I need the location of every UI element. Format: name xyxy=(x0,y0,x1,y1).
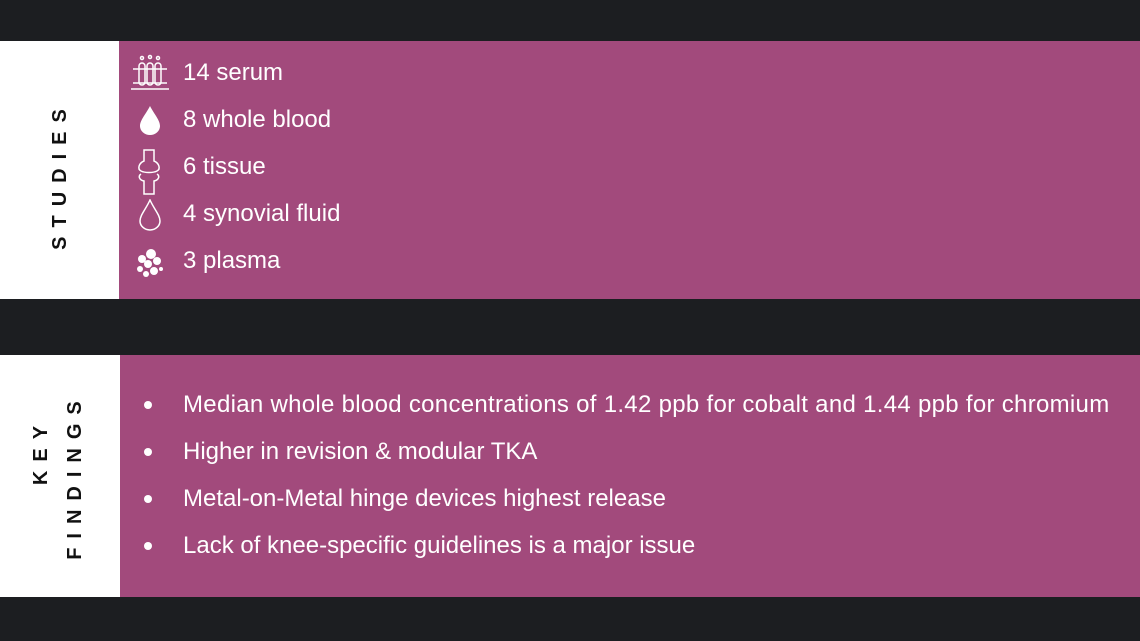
text: 6 tissue: 6 tissue xyxy=(183,153,266,180)
bullet 3 xyxy=(144,495,152,503)
icon: plasma cells xyxy=(137,249,163,277)
panel: studies xyxy=(0,41,1140,299)
text: 8 whole blood: 8 whole blood xyxy=(183,106,331,133)
text: 3 plasma: 3 plasma xyxy=(183,247,280,274)
content panel: key findings xyxy=(120,355,1140,597)
label panel: key findings xyxy=(0,355,120,597)
label panel: studies xyxy=(0,41,119,299)
text: 14 serum: 14 serum xyxy=(183,59,283,86)
bullet 2 xyxy=(144,448,152,456)
text: 4 synovial fluid: 4 synovial fluid xyxy=(183,200,340,227)
bullet 1 xyxy=(144,401,152,409)
text: finding 3: Metal-on-Metal hinge devices highest release xyxy=(183,485,666,512)
heading: findings: FINDINGS xyxy=(64,392,86,560)
text: finding 1: Median whole blood concentrations of 1.42 ppb for cobalt and 1.44 ppb for chromium xyxy=(183,391,1110,418)
icon: knee joint xyxy=(138,149,160,195)
text: finding 2: Higher in revision & modular TKA xyxy=(183,438,537,465)
heading: key: KEY xyxy=(30,417,52,485)
heading: studies: STUDIES xyxy=(49,100,71,250)
bullet 4 xyxy=(144,542,152,550)
content panel: studies xyxy=(119,41,1140,299)
icon: blood drop xyxy=(140,106,160,135)
icon: test tubes xyxy=(131,54,169,90)
panel: key findings xyxy=(0,355,1140,597)
icon: synovial drop xyxy=(139,199,161,231)
text: finding 4: Lack of knee-specific guidelines is a major issue xyxy=(183,532,695,559)
